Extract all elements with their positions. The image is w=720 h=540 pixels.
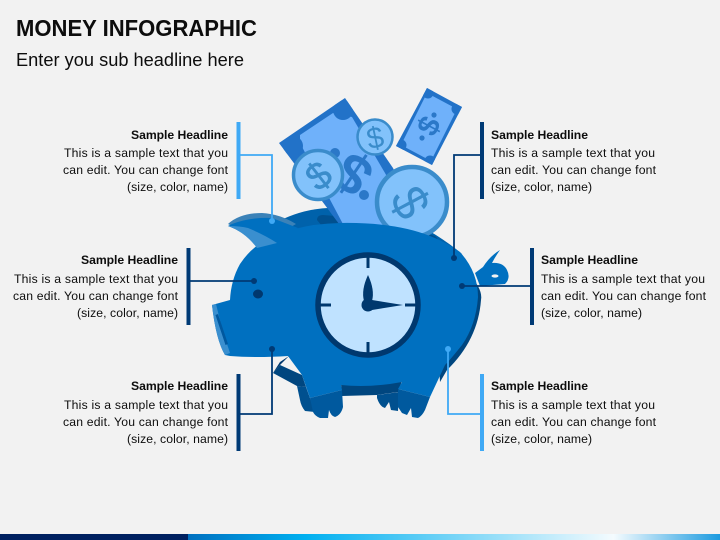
icon: small coin: $: [364, 121, 387, 156]
callout: top left: can edit. You can change font: [63, 163, 229, 177]
pig near right leg: [398, 389, 430, 418]
pig tail: [475, 250, 509, 286]
icon: large banknote: $: [323, 140, 384, 209]
callout: bottom left: (size, color, name): [127, 432, 228, 446]
clock: [318, 255, 418, 355]
callout: bottom left: can edit. You can change font: [63, 415, 229, 429]
pig back-shadow: [435, 275, 481, 382]
icon: left coin: $: [298, 154, 340, 200]
callout: top left: This is a sample text that you: [64, 146, 228, 160]
callout: middle right: can edit. You can change font: [541, 289, 707, 303]
pig inner ear: [228, 226, 277, 248]
callout: middle right: This is a sample text that you: [541, 272, 705, 286]
icon: large banknote: [279, 98, 394, 225]
callout: top right: Sample Headline: [491, 128, 588, 142]
callout: bottom right: [445, 346, 657, 451]
callout: top right: [451, 122, 657, 261]
pig snout: [212, 304, 230, 355]
callout: middle left: [13, 248, 257, 325]
pig body: [212, 223, 478, 398]
pig belly shade: [341, 381, 402, 396]
callout: bottom left: [63, 346, 275, 451]
icon: large coin: $: [379, 177, 441, 228]
icon: large coin: [377, 167, 447, 237]
pig ear front: [228, 218, 298, 250]
callout: bottom right: This is a sample text that you: [491, 398, 655, 412]
icon: small banknote: [396, 88, 462, 166]
callout: middle right: (size, color, name): [541, 306, 642, 320]
pig near left leg: [310, 390, 343, 418]
callout: middle left: (size, color, name): [77, 306, 178, 320]
clock hands: [363, 275, 373, 301]
callout: bottom left: Sample Headline: [131, 379, 228, 393]
pig eye: [253, 290, 263, 298]
callout: middle left: Sample Headline: [81, 253, 178, 267]
pig ear rim: [228, 213, 296, 245]
callout: middle left: This is a sample text that you: [14, 272, 178, 286]
callout: top left: Sample Headline: [131, 128, 228, 142]
callout: top right: This is a sample text that you: [491, 146, 655, 160]
callout: bottom right: Sample Headline: [491, 379, 588, 393]
callout: top left: (size, color, name): [127, 180, 228, 194]
icon: small banknote: $: [411, 111, 448, 141]
pig: [212, 213, 509, 418]
callout: top right: (size, color, name): [491, 180, 592, 194]
footer bar: [0, 534, 720, 540]
pig back and coin slot: [283, 208, 462, 254]
callout: middle left: can edit. You can change font: [13, 289, 179, 303]
callout: middle right: Sample Headline: [541, 253, 638, 267]
pig haunch: [273, 365, 306, 387]
subtitle: Enter you sub headline here: [16, 50, 244, 70]
pig far right leg: [377, 392, 399, 411]
callout: bottom right: can edit. You can change font: [491, 415, 657, 429]
callout: top left: [63, 122, 275, 224]
callout: top right: can edit. You can change font: [491, 163, 657, 177]
callout: middle right: [459, 248, 707, 325]
pig far left leg: [297, 386, 315, 412]
icon: small coin: [358, 120, 392, 156]
pig chin crease: [273, 356, 289, 373]
title: MONEY INFOGRAPHIC: [16, 15, 257, 41]
callout: bottom right: (size, color, name): [491, 432, 592, 446]
callout: bottom left: This is a sample text that you: [64, 398, 228, 412]
